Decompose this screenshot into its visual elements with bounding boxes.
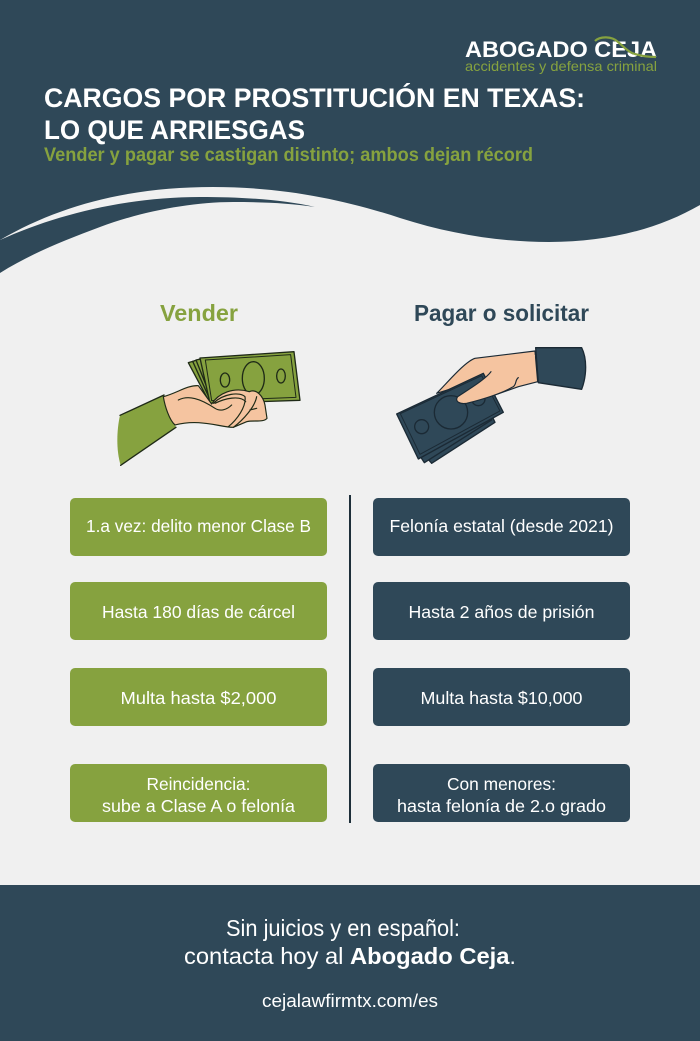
panel: Pagar items bbox=[373, 498, 630, 822]
item: menores: Con menores: bbox=[447, 774, 556, 794]
item: reincidencia: Reincidencia: bbox=[146, 774, 250, 794]
item: reincidencia: sube a Clase A o felonía bbox=[102, 796, 295, 816]
heading: Pagar o solicitar: Pagar o solicitar bbox=[414, 300, 589, 326]
icon: hand receiving money bbox=[117, 352, 300, 465]
footer bbox=[0, 885, 700, 1041]
logo bbox=[465, 37, 657, 74]
item: primera vez: 1.a vez: delito menor Clase B bbox=[86, 516, 311, 536]
call to action: Sin juicios y en español: bbox=[226, 915, 460, 941]
item: reincidencia bbox=[70, 764, 327, 822]
divider bbox=[349, 495, 351, 823]
item: felonía: Felonía estatal (desde 2021) bbox=[390, 516, 614, 536]
item: multa: Multa hasta $10,000 bbox=[420, 688, 583, 708]
call to action: contacta hoy al Abogado Ceja. bbox=[184, 943, 516, 969]
heading: Vender: Vender bbox=[160, 300, 238, 326]
title: LO QUE ARRIESGAS bbox=[44, 115, 305, 145]
title: CARGOS POR PROSTITUCIÓN EN TEXAS: bbox=[44, 82, 585, 113]
item: primera vez bbox=[70, 498, 327, 556]
item: multa bbox=[70, 668, 327, 726]
item: prisión bbox=[373, 582, 630, 640]
item: multa bbox=[373, 668, 630, 726]
item: menores: hasta felonía de 2.o grado bbox=[397, 796, 606, 816]
subtitle: Vender y pagar se castigan distinto; ambos dejan récord bbox=[44, 145, 533, 166]
panel: Vender items bbox=[70, 498, 327, 822]
item: felonía bbox=[373, 498, 630, 556]
logo: ABOGADO CEJA bbox=[465, 37, 657, 62]
item: menores bbox=[373, 764, 630, 822]
item: cárcel bbox=[70, 582, 327, 640]
item: prisión: Hasta 2 años de prisión bbox=[408, 602, 594, 622]
logo: accidentes y defensa criminal bbox=[465, 58, 657, 74]
item: multa: Multa hasta $2,000 bbox=[120, 688, 277, 708]
item: cárcel: Hasta 180 días de cárcel bbox=[102, 602, 295, 622]
title bbox=[44, 82, 585, 145]
website: cejalawfirmtx.com/es bbox=[262, 991, 438, 1011]
header band bbox=[0, 0, 700, 273]
call to action bbox=[184, 915, 516, 969]
icon: hand paying money bbox=[397, 348, 586, 463]
